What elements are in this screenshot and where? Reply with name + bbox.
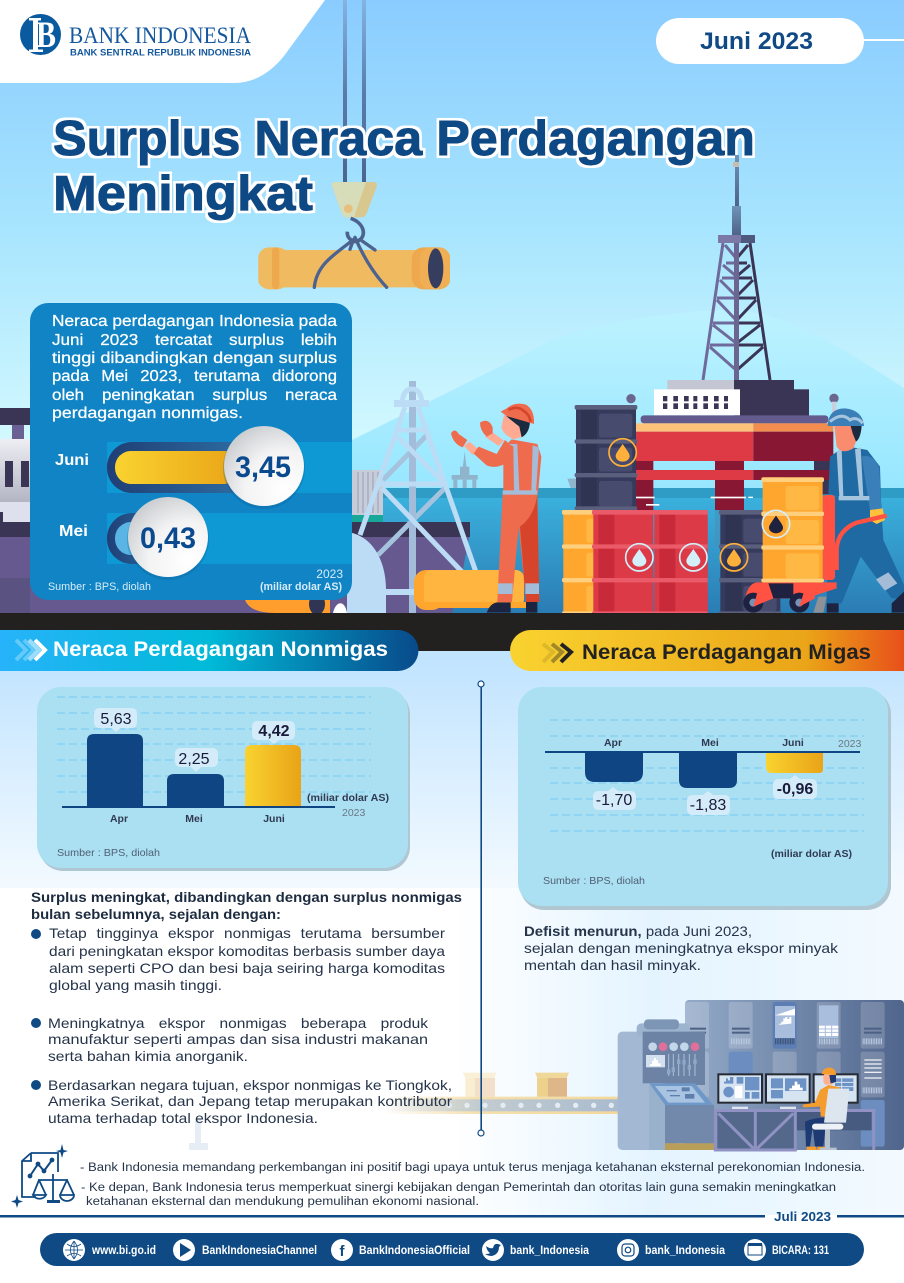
- chart: Nonmigas: 2023: [342, 807, 366, 819]
- value: -1,83: -1,83: [690, 797, 726, 814]
- heading: Nonmigas: Neraca Perdagangan Nonmigas: [53, 638, 388, 661]
- text: nonmigas lead: bulan sebelumnya, sejalan dengan:: [31, 906, 281, 922]
- summary text: tinggi dibandingkan dengan surplus: [52, 350, 337, 367]
- text: bullet 3: utama terhadap total ekspor Indonesia.: [48, 1110, 318, 1126]
- chart: Nonmigas: (miliar dolar AS): [307, 792, 389, 804]
- icon: instagram: [617, 1239, 639, 1261]
- text: closing statements: [80, 1162, 865, 1208]
- header white shape: [0, 0, 325, 83]
- text: bullet 2: manufaktur seperti ampas dan sisa industri makanan: [48, 1031, 428, 1047]
- chart labels: [110, 813, 285, 825]
- text: bullet 1: Tetap tingginya ekspor nonmigas terutama bersumber: [49, 925, 445, 941]
- value: 2,25: [175, 748, 218, 772]
- summary text: Juni 2023 tercatat surplus lebih: [52, 332, 337, 349]
- text: nonmigas lead: [31, 889, 462, 922]
- value: -1,70: -1,70: [596, 792, 632, 809]
- date pill: Juni 2023: [656, 18, 904, 64]
- chart labels: Apr: [604, 737, 622, 749]
- chart: Migas: Sumber : BPS, diolah: [543, 875, 645, 887]
- background: sea: [0, 488, 904, 614]
- oil rig tower: [703, 155, 770, 380]
- value: -1,83: [687, 791, 730, 815]
- icon: analysis and scale: [11, 1144, 74, 1208]
- offshore platform: [626, 380, 839, 547]
- right scene: [451, 380, 904, 615]
- barrel icon: oil drop: [720, 544, 748, 571]
- barrels: [575, 405, 637, 510]
- black band: [0, 613, 904, 651]
- chart: Nonmigas: Sumber : BPS, diolah: [57, 847, 160, 859]
- panel source and unit: Sumber : BPS, diolah: [48, 581, 151, 593]
- date pill: Juni 2023: Juni 2023: [700, 28, 813, 55]
- logo: Bank Indonesia: B: [36, 15, 56, 56]
- icon: twitter: [482, 1239, 504, 1261]
- panel source and unit: (miliar dolar AS): [260, 581, 342, 593]
- logo: Bank Indonesia: BANK SENTRAL REPUBLIK INDONESIA: [70, 48, 251, 58]
- heading: Nonmigas: [0, 630, 418, 671]
- lower background: [0, 651, 904, 1283]
- text: migas: mentah dan hasil minyak.: [524, 957, 701, 973]
- barrel icon: drop on red: [626, 544, 707, 571]
- summary text: pada Mei 2023, terutama didorong: [52, 368, 337, 385]
- bar: Apr: [585, 753, 643, 782]
- summary text: oleh peningkatan surplus neraca: [52, 387, 337, 404]
- text: closing statements: - Bank Indonesia memandang perkembangan ini positif bagi upaya untuk terus menjaga ketahanan eksternal perekonomian Indonesia.: [80, 1162, 865, 1174]
- timeline line: [478, 681, 484, 1136]
- left ship: [0, 408, 30, 578]
- value: 4,42: [252, 721, 295, 744]
- bar: Mei: [167, 774, 224, 806]
- text: bullet 2: serta bahan kimia anorganik.: [48, 1048, 248, 1064]
- icon: contact center: [744, 1239, 766, 1261]
- chart labels: Mei: [701, 737, 719, 749]
- chart labels: Apr: [110, 813, 128, 825]
- panel: summary: [30, 303, 352, 600]
- title: Surplus Neraca Perdagangan: [53, 112, 755, 166]
- crane ropes: [343, 0, 366, 184]
- conveyor belt: [383, 1073, 618, 1114]
- text: bullet 3: Berdasarkan negara tujuan, ekspor nonmigas ke Tiongkok,: [48, 1077, 452, 1093]
- chart labels: Juni: [782, 737, 804, 749]
- operator: [803, 1068, 849, 1150]
- chart: Nonmigas: [37, 687, 410, 871]
- text: bullet 2: [31, 1015, 429, 1064]
- title: [53, 112, 755, 221]
- text: migas: sejalan dengan meningkatnya ekspor minyak: [524, 940, 839, 956]
- bar: Mei: 0,43: [140, 522, 196, 555]
- chart labels: [604, 737, 804, 749]
- text: closing statements: - Ke depan, Bank Indonesia terus memperkuat sinergi kebijakan dengan Pemerintah dan otoritas lain guna semakin meningkatkan: [81, 1182, 836, 1194]
- hanging pipe and hook: [258, 182, 450, 289]
- text: migas: Defisit menurun, pada Juni 2023,: [524, 923, 752, 939]
- text: bullet 1: dari peningkatan ekspor komoditas berbasis sumber daya: [49, 943, 445, 959]
- summary text: perdagangan nonmigas.: [52, 405, 243, 422]
- bar: Juni: [55, 426, 352, 509]
- barrel icon: drop on yellow: [762, 510, 790, 538]
- bar: Juni: [245, 745, 301, 806]
- value: 5,63: 5,63: [100, 711, 132, 728]
- footer contact bar: [40, 1233, 864, 1266]
- heading: Migas: [510, 630, 904, 671]
- monitors: [717, 1073, 859, 1109]
- bar: Juni: 3,45: [235, 451, 291, 484]
- factory illustration: [383, 1000, 904, 1150]
- footer rule and date: Juli 2023: [774, 1210, 831, 1224]
- bar: Mei: [59, 497, 352, 580]
- footer contact bar: BankIndonesiaOfficial: [359, 1245, 470, 1257]
- cargo ship hull: [0, 470, 470, 613]
- text: bullet 2: Meningkatnya ekspor nonmigas beberapa produk: [48, 1015, 429, 1031]
- footer contact bar: www.bi.go.id: [91, 1245, 156, 1257]
- faint conveyor post: [189, 1118, 208, 1150]
- control console: [618, 1019, 714, 1150]
- scene pipe: [245, 570, 528, 615]
- chart labels: Mei: [185, 813, 203, 825]
- pallet cart: [743, 495, 887, 613]
- worker right: [827, 408, 904, 613]
- chart: Migas: (miliar dolar AS): [771, 848, 852, 860]
- bar: Juni: Juni: [55, 452, 89, 469]
- text: closing statements: ketahanan eksternal dan mendukung pemulihan ekonomi nasional.: [86, 1196, 479, 1208]
- panel source and unit: 2023: [316, 567, 343, 581]
- value: 2,25: 2,25: [178, 751, 210, 768]
- server wall: [685, 1000, 904, 1150]
- footer contact bar: bank_Indonesia: [645, 1245, 726, 1257]
- footer contact bar: BICARA: 131: [772, 1245, 829, 1257]
- bar: Apr: [87, 734, 143, 806]
- summary text: Neraca perdagangan Indonesia pada: [52, 313, 337, 330]
- panel source and unit: [48, 567, 343, 593]
- summary text: [52, 313, 337, 422]
- logo: Bank Indonesia: BANK INDONESIA: [69, 23, 251, 48]
- bar: Mei: [679, 753, 737, 788]
- logo: Bank Indonesia: [20, 14, 251, 58]
- desk: [714, 1109, 876, 1150]
- background: sky: [0, 0, 904, 490]
- value: -1,70: [593, 787, 636, 810]
- text: bullet 1: [31, 925, 445, 993]
- chart: Migas: [518, 687, 891, 910]
- text: nonmigas lead: Surplus meningkat, dibandingkan dengan surplus nonmigas: [31, 889, 462, 905]
- value: 5,63: [94, 708, 137, 732]
- footer contact bar: BankIndonesiaChannel: [202, 1245, 317, 1257]
- text: bullet 3: [31, 1077, 452, 1126]
- background: mountain: [352, 310, 904, 490]
- text: bullet 3: Amerika Serikat, dan Jepang tetap merupakan kontributor: [48, 1093, 452, 1109]
- value: -0,96: -0,96: [777, 781, 813, 798]
- icon: facebook: f: [340, 1243, 346, 1260]
- footer contact bar: bank_Indonesia: [510, 1245, 590, 1257]
- heading: Migas: Neraca Perdagangan Migas: [582, 641, 871, 664]
- icon: facebook: [331, 1239, 353, 1261]
- chart: Migas: 2023: [838, 738, 862, 750]
- chart labels: Juni: [263, 813, 285, 825]
- text: migas: [524, 923, 839, 973]
- icon: website: [63, 1239, 85, 1261]
- text: bullet 1: global yang masih tinggi.: [49, 977, 222, 993]
- worker left: [451, 404, 541, 613]
- icon: video channel: [173, 1239, 195, 1261]
- value: -0,96: [773, 775, 817, 799]
- pylon dome base: [347, 532, 386, 613]
- distant rig: [452, 452, 577, 488]
- title: Meningkat: [53, 167, 313, 221]
- pylon tower: [360, 381, 477, 613]
- text: bullet 1: alam seperti CPO dan besi baja seiring harga komoditas: [49, 960, 445, 976]
- barrel icon: oil drop: [609, 439, 636, 466]
- bar: Juni: [766, 753, 823, 773]
- value: 4,42: 4,42: [258, 723, 290, 740]
- bar: Mei: Mei: [59, 523, 88, 540]
